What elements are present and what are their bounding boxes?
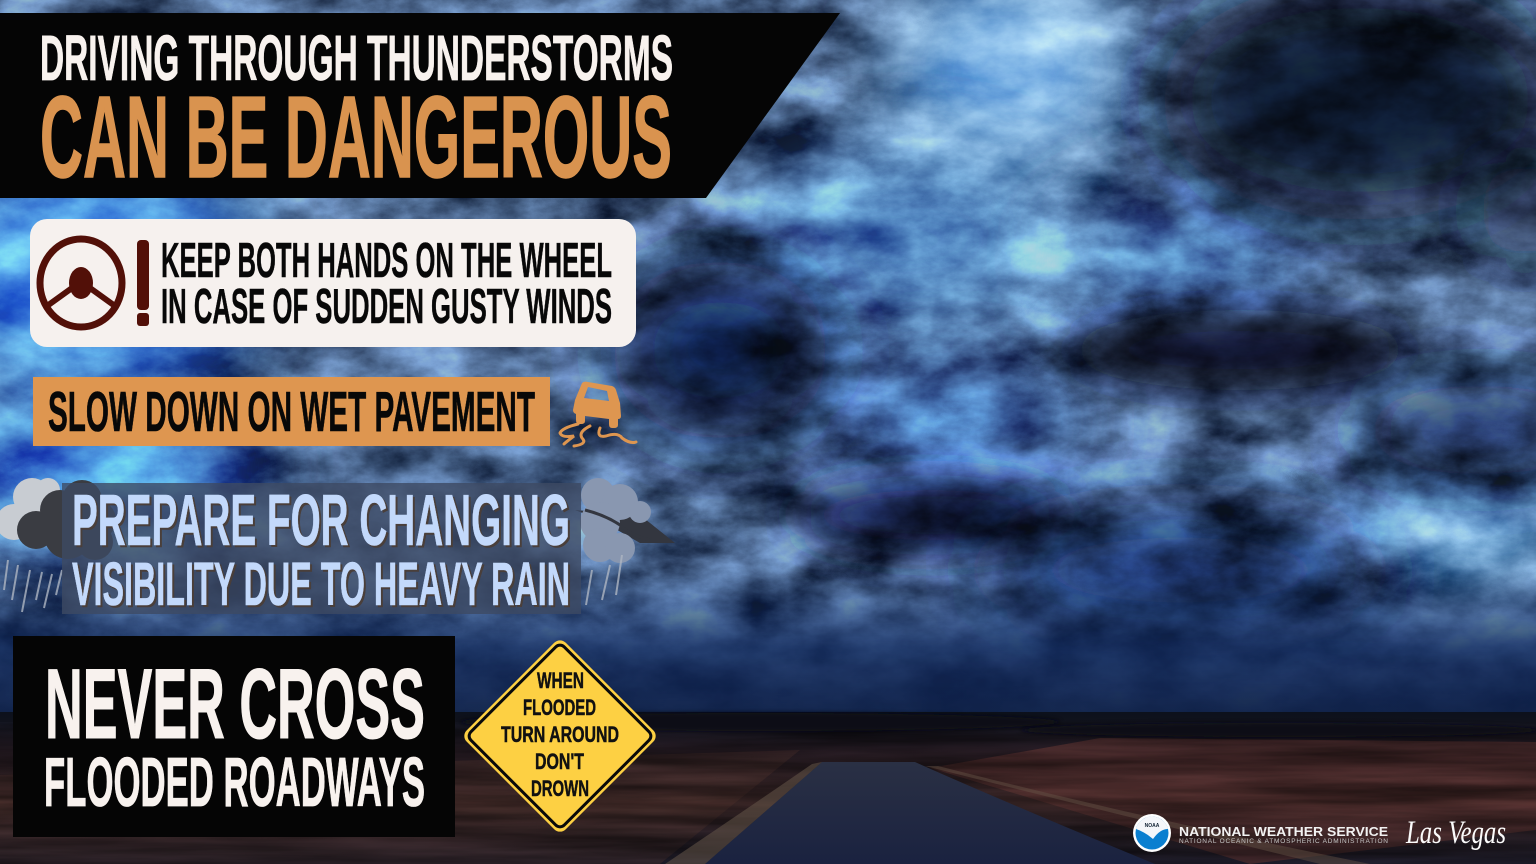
- road sign: when flooded turn around: DON'T: [535, 749, 584, 774]
- logo text: National Weather Service: NATIONAL OCEANIC & ATMOSPHERIC ADMINISTRATION: [1179, 838, 1388, 845]
- panel: slow down on wet pavement: [33, 377, 550, 446]
- prepare text shadow: [74, 483, 572, 620]
- title line 2: CAN BE DANGEROUS: [40, 72, 672, 202]
- prepare text: VISIBILITY DUE TO HEAVY RAIN: [72, 550, 570, 618]
- road sign: when flooded turn around: WHEN: [537, 668, 584, 693]
- icon: storm cloud right: [575, 478, 675, 605]
- panel: keep both hands on the wheel: [30, 219, 636, 347]
- panel: prepare for changing visibility: [62, 481, 581, 620]
- road sign: when flooded turn around: [461, 637, 659, 835]
- prepare text: [72, 481, 570, 618]
- panel: never cross flooded roadways: NEVER CROSS: [45, 648, 425, 759]
- icon: steering wheel: [40, 239, 122, 327]
- title line 1: DRIVING THROUGH THUNDERSTORMS: [40, 22, 673, 94]
- title banner: [0, 13, 840, 202]
- logo text: National Weather Service: [1179, 825, 1388, 845]
- icon: skidding car: [560, 382, 636, 446]
- prepare text: PREPARE FOR CHANGING: [72, 481, 570, 561]
- panel: never cross flooded roadways: [13, 636, 455, 837]
- logo: NOAA emblem: [1133, 814, 1171, 852]
- prepare text shadow: PREPARE FOR CHANGING: [74, 483, 572, 563]
- icon: storm cloud left: [0, 478, 116, 612]
- wheel text: KEEP BOTH HANDS ON THE WHEEL: [161, 234, 612, 288]
- wheel text: IN CASE OF SUDDEN GUSTY WINDS: [161, 280, 612, 334]
- road sign: when flooded turn around: FLOODED: [523, 695, 596, 720]
- panel: slow down on wet pavement: SLOW DOWN ON WET PAVEMENT: [48, 380, 535, 444]
- logo text: National Weather Service: NATIONAL WEATHER SERVICE: [1179, 825, 1388, 839]
- road: [705, 762, 1155, 864]
- wheel text: [161, 234, 612, 334]
- prepare text shadow: VISIBILITY DUE TO HEAVY RAIN: [74, 552, 572, 620]
- logo: NOAA emblem: NOAA: [1145, 823, 1160, 829]
- road sign: when flooded turn around: DROWN: [531, 776, 589, 801]
- road sign: when flooded turn around: TURN AROUND: [501, 722, 619, 747]
- panel: never cross flooded roadways: FLOODED ROADWAYS: [44, 743, 425, 821]
- icon: exclamation mark: [137, 240, 149, 326]
- logo text: Las Vegas: Las Vegas: [1405, 815, 1506, 851]
